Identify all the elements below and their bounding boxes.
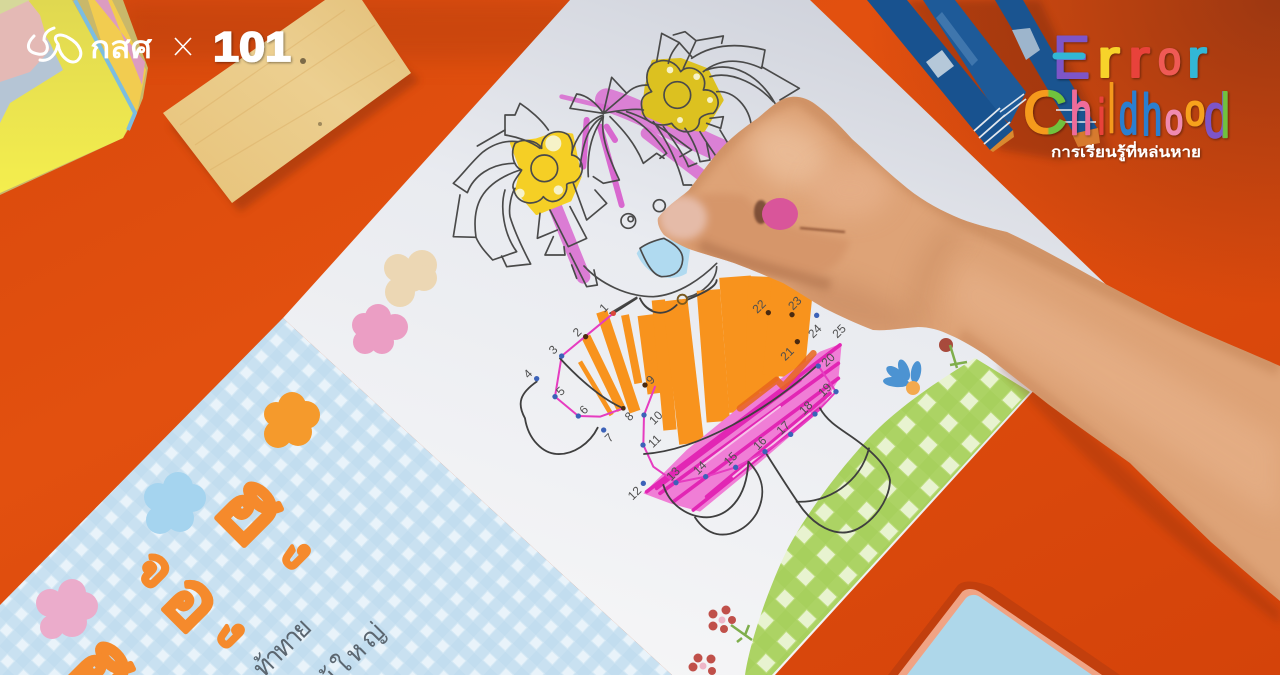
dot numbers: 6 [577,402,591,417]
thumb crease [800,228,845,232]
thumb tip [659,196,707,240]
pink crayon end [762,198,798,230]
word: Childhood: i [1098,89,1105,145]
logo text: 101: 101 [213,23,291,70]
orange crayon blouse [580,277,793,443]
wrist shadow [916,240,946,308]
dot numbers: 14 [690,458,710,478]
flower: pastel stripes [384,250,437,307]
flower: red small right [939,338,967,368]
dot numbers: 22 [750,297,769,316]
blue gingham page [0,318,672,675]
doll body with dot-to-dot numbers [521,277,890,535]
dot numbers: 12 [625,483,644,503]
dot numbers [521,293,849,503]
dot numbers: 10 [646,408,666,428]
dots [534,310,839,486]
hand top edge shading [680,95,1280,366]
child's hand and arm holding a pink crayon [640,80,1280,625]
dot numbers: 4 [521,366,535,381]
crayon 3 [995,0,1100,147]
small text on blue page [247,612,392,675]
wooden block [163,0,420,212]
book title in orange: อ [145,553,241,649]
doll line art [453,32,799,313]
dot numbers: 15 [721,449,740,469]
word: Error: r [1128,29,1150,89]
word: Childhood: h [1070,80,1092,147]
dot numbers: 20 [819,350,838,370]
white colouring book page [283,0,1119,675]
dot numbers: 3 [546,342,561,357]
notebook or phone at bottom right [888,581,1120,675]
word: Error [1053,24,1207,91]
yellow flower fills [512,60,722,213]
blue crayons [867,0,1110,160]
forearm highlight [960,276,1274,500]
dot numbers: 23 [785,293,805,313]
word: Childhood: l [1108,71,1115,147]
book title in orange: ง [206,605,259,658]
dot numbers: 21 [778,344,797,364]
dot numbers: 11 [645,432,664,451]
arm lower edge shading [960,335,1280,601]
flower: red smallest [688,654,716,675]
pink hair scribble [555,97,723,277]
word: Error: r [1187,29,1207,89]
book title in orange [47,450,324,675]
dot numbers: 2 [570,325,585,339]
knuckle highlight [745,116,833,192]
dot numbers: 25 [830,321,849,341]
lower palm shadow [796,278,904,330]
dot numbers: 17 [774,418,793,438]
Thai subtitle: การเรียนรู้ที่หล่นหาย [1051,141,1201,162]
dot numbers: 18 [796,398,816,418]
dot numbers: 19 [815,380,835,400]
logo: partners (EEF x 101) [28,23,291,70]
bird logo mark [28,28,81,62]
word: Childhood [1023,71,1230,151]
word: Error: r [1097,29,1120,89]
dot numbers: 8 [622,409,637,424]
word: Childhood: C [1023,79,1067,146]
doll head drawing [453,32,799,313]
logo: Error Childhood [1023,24,1230,162]
blue mouth fill [637,239,690,278]
dot numbers: 13 [664,464,683,484]
flower: blue on hill [883,358,923,395]
dot numbers: 9 [643,372,658,387]
logo text: EEF: กสศ [90,30,152,65]
cross sign [175,38,191,55]
flower: orange dotted [264,392,320,448]
crayon 1 [867,0,1014,152]
black line art [521,280,890,535]
flower: pink [36,579,98,639]
word: Childhood: h [1142,83,1162,148]
dot numbers: 5 [553,384,568,398]
flower: red small lower [708,606,752,642]
flower: blue [144,472,206,534]
word: Error: E [1053,24,1090,91]
green gingham hill [745,358,1030,675]
book title in orange: ง [270,526,324,580]
dot numbers: 1 [597,300,611,315]
crayon shadow [754,200,768,224]
word: Childhood: o [1185,86,1205,135]
word: Childhood: o [1165,95,1183,144]
decorative small flowers on white page [352,250,967,675]
dot numbers: 16 [750,433,770,453]
thumb body [655,193,850,278]
dot numbers: 24 [805,321,825,341]
magenta crayon skirt [643,343,842,512]
yellow picture book stack [0,0,148,195]
book title in orange: จ [124,538,186,600]
dot numbers: 7 [602,430,617,445]
crayon 2 [923,0,1026,124]
thumb underside shadow [700,245,830,285]
pink connect-the-dots lines [555,313,836,483]
word: Error: o [1158,32,1181,84]
word: Childhood: d [1204,82,1230,151]
book title in orange: ฮ [195,450,311,566]
word: Childhood: d [1119,82,1138,147]
flower: pink check [352,304,408,354]
